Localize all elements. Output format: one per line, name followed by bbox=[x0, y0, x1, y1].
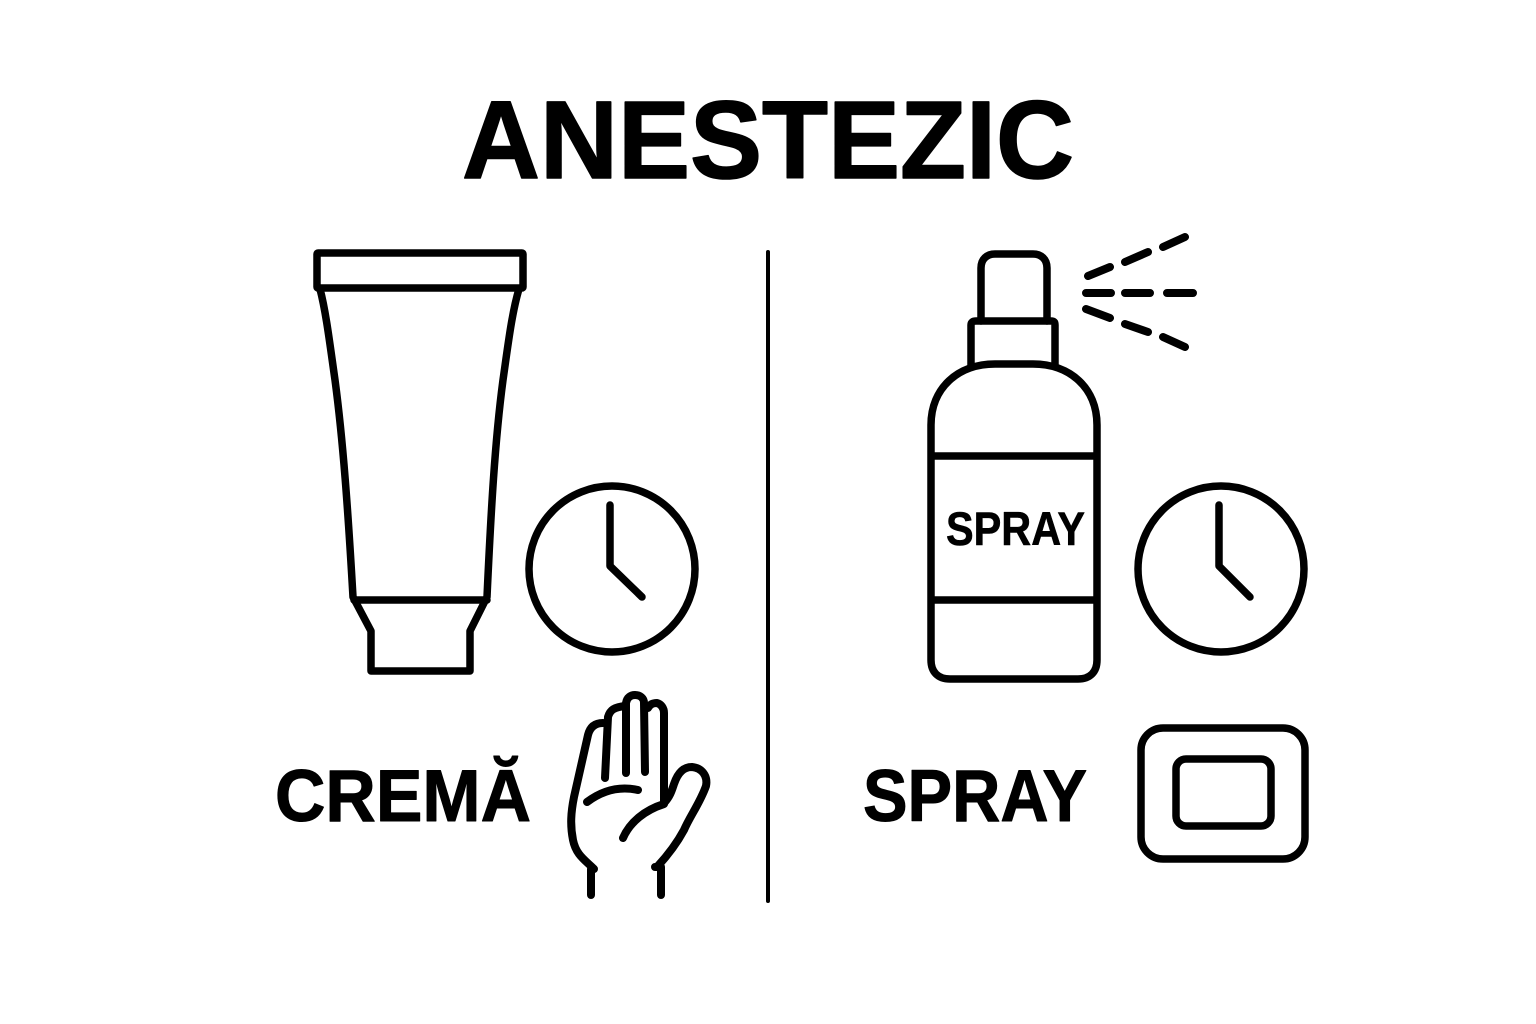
icon: hand bbox=[571, 695, 706, 895]
divider between the two panels bbox=[766, 252, 770, 901]
bottle label text: SPRAY bbox=[946, 502, 1085, 555]
icon: spray mist bbox=[1086, 237, 1193, 347]
label: spray: SPRAY bbox=[863, 756, 1087, 837]
icon: cream tube bbox=[317, 253, 523, 671]
panel: cream bbox=[275, 253, 706, 895]
icon: rounded patch bbox=[1141, 728, 1305, 859]
panel: spray bbox=[863, 237, 1305, 859]
icon: clock bbox=[529, 486, 695, 652]
label: cream: CREMĂ bbox=[275, 756, 531, 837]
icon: spray bottle bbox=[931, 254, 1097, 679]
icon: clock bbox=[1138, 486, 1304, 652]
title: ANESTEZIC bbox=[462, 79, 1074, 202]
